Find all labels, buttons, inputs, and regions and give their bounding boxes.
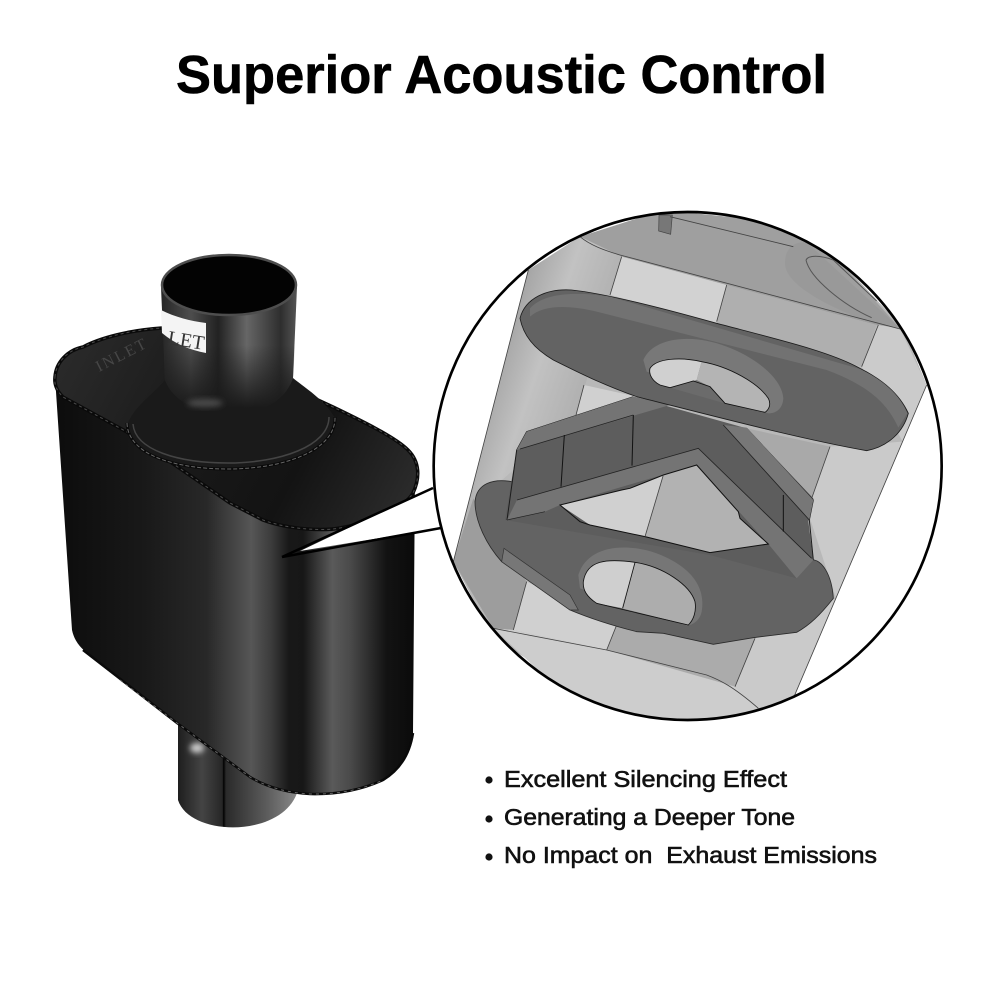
lower light tile <box>513 582 617 650</box>
internal view, clipped to lens <box>453 210 927 725</box>
mid tile, top <box>717 285 877 367</box>
infographic canvas <box>53 54 943 868</box>
welded cone at the top of the body <box>127 378 335 469</box>
lower left wall <box>453 498 527 630</box>
lower mid tile <box>607 625 755 687</box>
upper plate hole collar <box>643 339 783 413</box>
small tab <box>659 215 672 234</box>
bullet: emissions: No Impact on Exhaust Emissions <box>504 842 877 868</box>
mid tile, right <box>747 428 830 498</box>
bullet: silencing: Excellent Silencing Effect <box>504 766 788 792</box>
bottom wall <box>493 628 758 725</box>
triangular frame <box>505 397 813 578</box>
lower outlet pipe <box>178 715 298 827</box>
upper plate hole <box>650 359 770 412</box>
right tile, lower <box>810 442 903 598</box>
muffler body <box>55 377 415 794</box>
embossed inlet text: INLET <box>93 335 151 376</box>
light gap below the upper plate <box>576 385 637 415</box>
upper plate rim band <box>530 294 907 428</box>
lower right tile <box>735 598 836 708</box>
label on the pipe <box>161 310 206 355</box>
lower plate hole <box>583 561 695 625</box>
light tile, top <box>610 257 727 323</box>
seam at bottom of body <box>83 650 413 794</box>
left column wall <box>484 238 596 480</box>
title: Superior Acoustic Control <box>176 45 827 105</box>
lower baffle plate <box>475 481 833 644</box>
magnified cross-section circle <box>434 210 942 725</box>
lower plate edge strip <box>502 548 578 610</box>
bullet: tone: Generating a Deeper Tone <box>504 804 795 830</box>
frame opening <box>560 465 768 553</box>
callout pointer edges <box>282 488 441 557</box>
upper inner wall <box>580 210 900 328</box>
product image: muffler <box>55 255 418 827</box>
pipe wall backdrop <box>453 212 927 722</box>
lower plate hole collar <box>578 547 702 626</box>
ellipse port at top right <box>806 256 900 328</box>
upper baffle plate <box>520 290 908 451</box>
lens outline <box>434 212 942 720</box>
upper inlet pipe <box>161 255 297 416</box>
label on the pipe: LET <box>166 327 206 355</box>
bullet list <box>485 766 877 868</box>
callout pointer <box>300 488 441 551</box>
right tile, top <box>862 325 927 442</box>
tile lines <box>453 217 927 708</box>
muffler top face <box>55 328 418 529</box>
